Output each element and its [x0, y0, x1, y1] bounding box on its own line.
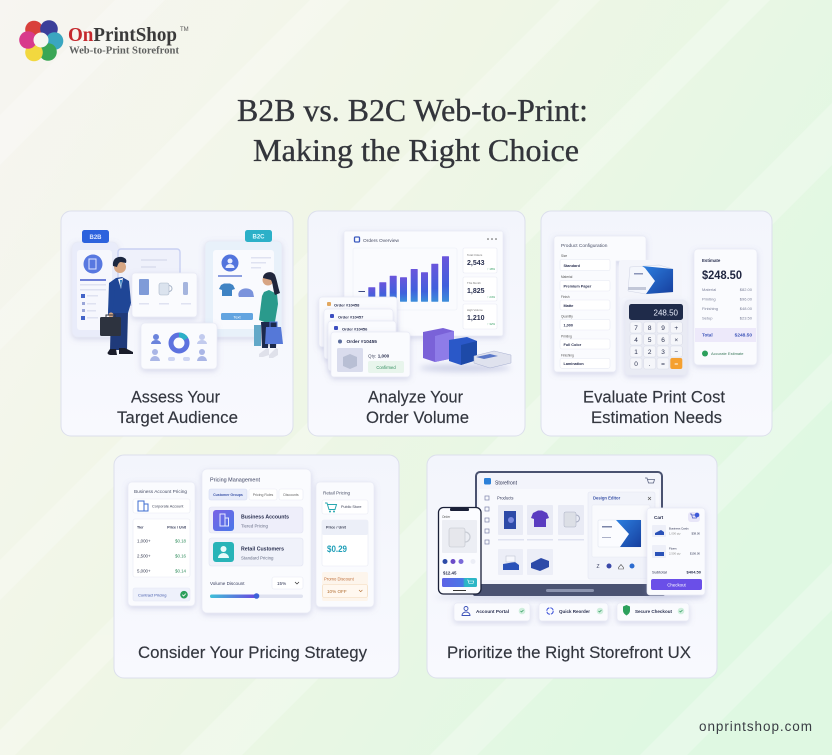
card label: Prioritize the Right Storefront UX — [447, 644, 691, 662]
panel: analyze your order volume — [308, 211, 525, 436]
card label: Assess Your — [131, 388, 220, 406]
icon: calculator: = — [661, 361, 665, 368]
panel: pricing management: Customer Groups — [213, 493, 243, 497]
icon: calculator: 7 — [634, 325, 638, 332]
panel: estimate: Material — [702, 287, 716, 292]
panel: cart: $156.00 — [690, 552, 700, 556]
badge: B2B: B2B — [89, 235, 102, 241]
panel: prioritize storefront UX — [427, 455, 717, 678]
panel: business account pricing: Price / Unit — [167, 526, 187, 530]
panel: pricing management: Discounts — [283, 493, 299, 497]
form: product configuration: Product Configuration — [561, 243, 608, 249]
panel: business account pricing: Tier — [137, 526, 144, 530]
chip: secure checkout: Secure Checkout — [635, 609, 673, 614]
chip: quick reorder: Quick Reorder — [559, 609, 590, 614]
form: product configuration: Full Color — [564, 343, 582, 347]
footer url: onprintshop.com — [699, 719, 812, 734]
icon: calculator — [625, 300, 687, 375]
icon: product boxes — [419, 328, 511, 372]
icon: calculator: . — [649, 361, 651, 368]
stat: high volume: 1,210 — [467, 315, 485, 322]
panel: estimate: $23.50 — [740, 316, 753, 320]
panel: design editor — [588, 492, 655, 579]
panel: consider pricing strategy — [114, 455, 399, 678]
logo tagline: Web-to-Print Storefront — [69, 46, 180, 56]
badge: B2C — [245, 230, 272, 242]
panel: business account pricing — [128, 482, 195, 606]
card label: Estimation Needs — [591, 409, 722, 427]
stat: total orders: Total Orders — [467, 253, 483, 257]
card: order 10455 — [331, 332, 410, 377]
panel: evaluate print cost — [541, 211, 772, 436]
form: product configuration: Lamination — [564, 362, 584, 366]
panel: business account pricing: Corporate Account — [152, 504, 184, 508]
panel: estimate — [694, 249, 757, 365]
stat: this month: 1,825 — [467, 288, 485, 295]
panel: cart: $38.00 — [691, 532, 700, 536]
panel: business account pricing: 5,000+ — [137, 568, 151, 574]
panel: cart: $404.50 — [687, 570, 702, 574]
title: B2B vs. B2C Web-to-Print: — [237, 92, 588, 128]
panel: business account pricing: $0.14 — [175, 568, 187, 574]
logo — [19, 20, 189, 61]
panel: assess your target audience — [61, 211, 293, 436]
row: business accounts: Business Accounts — [241, 514, 289, 520]
row: business accounts — [209, 507, 303, 533]
title: Making the Right Choice — [253, 132, 579, 168]
icon: calculator: 2 — [648, 349, 652, 356]
panel: cart: Flyers — [669, 546, 677, 550]
icon: colour flower — [19, 20, 63, 61]
trademark: TM — [180, 27, 189, 33]
card: order 10455: Order #10455 — [346, 339, 377, 345]
form: product configuration: Quantity — [561, 314, 573, 318]
icon: calculator: 8 — [648, 325, 652, 332]
stat: total orders — [463, 248, 497, 273]
form: product configuration: Matte — [564, 304, 573, 308]
card label: Order Volume — [366, 409, 469, 427]
panel: estimate: $82.00 — [740, 287, 753, 292]
stat: this month: This Month — [467, 281, 481, 285]
icon: phone: $12.45 — [443, 570, 457, 576]
card label: Consider Your Pricing Strategy — [138, 644, 368, 662]
panel: cart: 1,000 qty — [669, 532, 681, 536]
panel: pricing management — [202, 469, 311, 613]
card: order 10455: Confirmed — [376, 365, 396, 370]
panel: design editor: Z — [596, 564, 600, 570]
panel: orders overview dashboard: Orders Overview — [363, 238, 400, 244]
card label — [583, 388, 725, 427]
panel: estimate: $248.50 — [735, 332, 752, 338]
panel: estimate: Accurate Estimate — [711, 351, 744, 356]
panel: business account pricing: Contract Pricing — [138, 592, 166, 598]
panel: estimate: $248.50 — [702, 268, 742, 282]
panel: order stack — [319, 297, 410, 377]
icon: businessman — [100, 257, 133, 355]
icon: calculator: − — [674, 349, 678, 356]
icon: phone — [438, 508, 481, 594]
icon: calculator: 4 — [634, 337, 638, 344]
icon: calculator: 9 — [661, 325, 665, 332]
panel: retail pricing: Retail Pricing — [323, 490, 351, 496]
chip: quick reorder — [539, 603, 608, 621]
panel: cart: 2,500 qty — [669, 552, 681, 556]
panel: order stack: Order #10457 — [338, 314, 364, 320]
panel: B2C profile — [205, 241, 282, 337]
panel: business account pricing: $0.18 — [175, 538, 187, 544]
form: product configuration: Finish — [561, 295, 570, 299]
badge: B2B — [82, 230, 109, 243]
row: retail customers — [209, 538, 303, 566]
product thumbs — [498, 505, 584, 575]
form: product configuration: 1,000 — [564, 324, 573, 328]
logo name: OnPrintShop — [68, 24, 177, 46]
panel: cart — [647, 508, 705, 595]
panel: business account pricing: Business Account Pricing — [134, 489, 188, 494]
card label — [366, 388, 469, 427]
card: order 10455: Qty: 1,000 — [368, 354, 390, 358]
form: product configuration: Premium Paper — [564, 284, 592, 288]
row: business accounts: Tiered Pricing — [241, 524, 268, 528]
badge: B2C: B2C — [252, 234, 265, 240]
title — [237, 92, 588, 168]
form: product configuration: Size — [561, 254, 567, 258]
chip: account portal: Account Portal — [476, 609, 509, 614]
form: product configuration: Standard — [564, 264, 581, 268]
icon: customer — [254, 272, 283, 358]
panel: business account pricing: $0.16 — [175, 554, 187, 558]
panel: estimate: Estimate — [702, 258, 721, 263]
panel: cart: Subtotal — [652, 570, 667, 574]
panel: cart: Cart — [654, 515, 664, 520]
panel: orders overview dashboard — [344, 231, 503, 336]
panel: order stack: Order #10458 — [334, 302, 360, 308]
bar chart — [353, 248, 457, 310]
icon: laptop storefront: Storefront — [495, 480, 518, 486]
icon: calculator: 0 — [634, 361, 638, 368]
panel: estimate: Printing — [702, 296, 716, 302]
form: product configuration: Material — [561, 275, 573, 279]
panel: cart: Business Cards — [669, 526, 689, 530]
icon: calculator: = — [674, 361, 678, 368]
row: retail customers: Retail Customers — [241, 546, 284, 552]
panel: retail pricing: 10% OFF — [327, 589, 347, 594]
panel: estimate: Total — [702, 332, 713, 338]
icon: laptop storefront: Products — [497, 496, 514, 500]
panel: retail pricing: Price / Unit — [326, 526, 347, 530]
panel: order stack: Order #10456 — [342, 326, 368, 332]
panel: products — [132, 273, 197, 317]
chip: secure checkout — [617, 603, 689, 621]
icon: calculator: 3 — [661, 349, 665, 356]
panel: pricing management: Volume Discount — [210, 581, 245, 586]
panel: estimate: Finishing — [702, 306, 718, 311]
panel: estimate: $96.00 — [740, 296, 753, 302]
stat: total orders: 2,543 — [467, 260, 485, 267]
panel: B2B profile — [72, 242, 118, 337]
panel: estimate: $48.00 — [740, 306, 753, 311]
sidebar icons — [485, 496, 489, 544]
panel: business account pricing: 2,500+ — [137, 554, 151, 558]
panel: business account pricing: 1,000+ — [137, 538, 151, 544]
icon: phone: Order — [442, 515, 451, 519]
panel: audience segments — [141, 323, 217, 369]
panel: retail pricing: Public Store — [341, 505, 361, 509]
slider — [210, 593, 303, 599]
row: retail customers: Standard Pricing — [241, 556, 274, 560]
card label: Evaluate Print Cost — [583, 388, 725, 406]
panel: pricing management: Pricing Rules — [253, 493, 274, 497]
chip: account portal — [454, 603, 530, 621]
icon: calculator: 248.50 — [654, 308, 679, 318]
icon: calculator: 1 — [634, 349, 638, 356]
stat: high volume: High Volume — [467, 308, 483, 312]
stat: this month: ↑ 24% — [487, 295, 496, 299]
stat: high volume — [463, 304, 497, 329]
form: product configuration: Finishing — [561, 354, 574, 358]
stat: high volume: ↑ 32% — [487, 322, 496, 326]
icon: calculator: × — [674, 337, 678, 344]
icon: calculator: 5 — [648, 337, 652, 344]
panel: B2B back sheet — [118, 249, 180, 305]
panel: pricing management: Pricing Management — [210, 478, 261, 484]
stat: total orders: ↑ 18% — [487, 267, 496, 271]
panel: design editor: Design Editor — [593, 496, 621, 500]
panel: retail pricing: Promo Discount — [324, 576, 355, 582]
form: product configuration: Printing — [561, 334, 572, 338]
panel: B2C profile: Text — [233, 314, 242, 320]
card label — [117, 388, 238, 427]
panel: retail pricing — [316, 482, 374, 607]
panel: pricing management: 15% — [277, 581, 286, 586]
card label: Target Audience — [117, 409, 238, 427]
panel: business card sample — [619, 260, 682, 298]
icon: calculator: + — [674, 325, 678, 332]
panel: cart: Checkout — [667, 582, 687, 588]
panel: estimate: Setup — [702, 316, 713, 320]
panel: retail pricing: $0.29 — [327, 544, 347, 554]
stat: this month — [463, 277, 497, 301]
card label: Analyze Your — [368, 388, 463, 406]
icon: calculator: 6 — [661, 337, 665, 344]
form: product configuration — [554, 236, 646, 372]
icon: laptop storefront — [435, 472, 705, 600]
